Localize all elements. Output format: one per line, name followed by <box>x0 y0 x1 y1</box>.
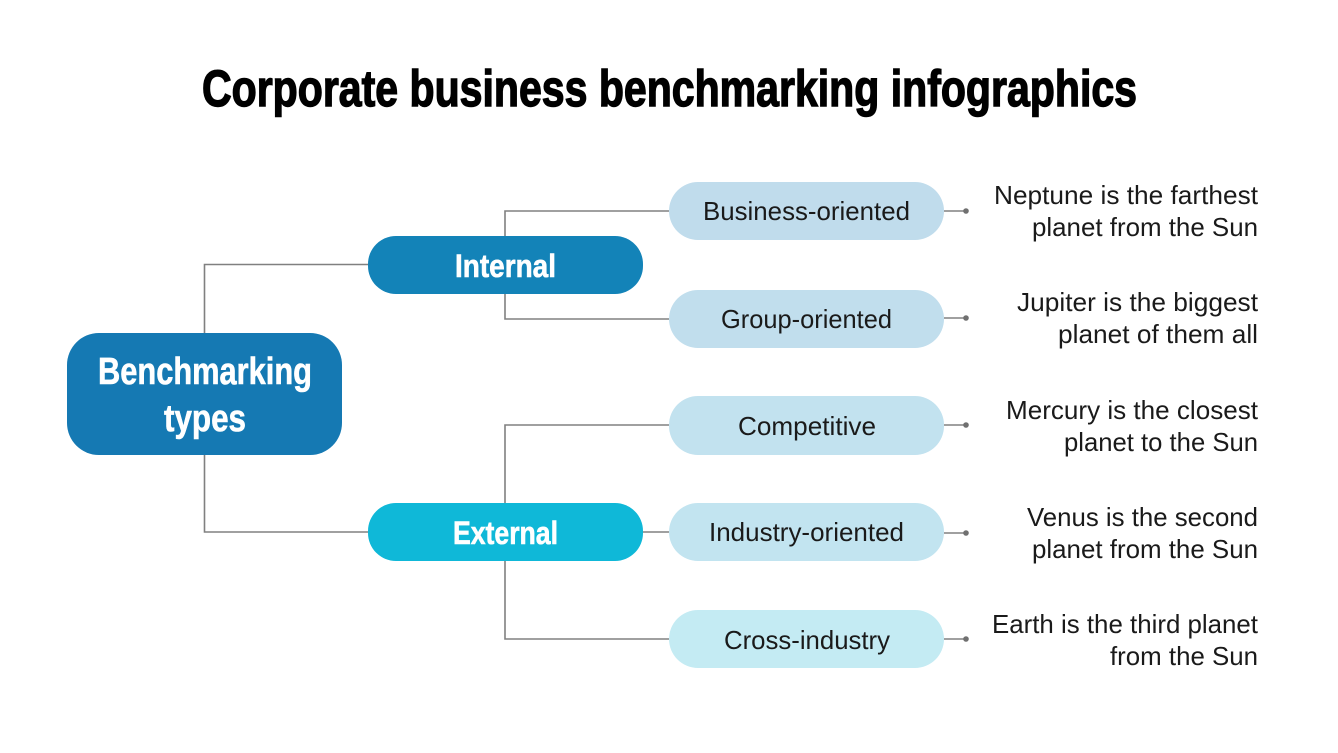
row: Industry-oriented: Venus is the second <box>1027 502 1258 532</box>
connector: external to industry-oriented <box>643 531 669 533</box>
row: Group-oriented: planet of them all <box>1058 319 1258 349</box>
row: Cross-industry <box>669 609 1259 671</box>
row: Business-oriented: Business-oriented <box>703 196 910 226</box>
row: Cross-industry: Earth is the third planet <box>992 609 1259 639</box>
row: Competitive: Competitive <box>738 411 876 441</box>
root node: Benchmarking types: Benchmarking <box>98 351 312 393</box>
row: Group-oriented: Group-oriented <box>721 304 892 334</box>
row: Group-oriented: Jupiter is the biggest <box>1017 287 1259 317</box>
row: Competitive: planet to the Sun <box>1064 427 1258 457</box>
connector: root to internal <box>204 264 368 333</box>
connector: internal to business-oriented <box>505 211 669 236</box>
node: Internal: Internal <box>455 248 556 284</box>
node: Internal <box>368 236 643 294</box>
row: Industry-oriented <box>669 502 1258 564</box>
connector: internal to group-oriented <box>505 294 669 319</box>
row: Competitive <box>669 395 1259 457</box>
row: Industry-oriented: planet from the Sun <box>1032 534 1258 564</box>
row: Business-oriented: planet from the Sun <box>1032 212 1258 242</box>
connector: external to competitive <box>505 425 669 503</box>
row: Group-oriented <box>669 287 1259 349</box>
row: Business-oriented: Neptune is the farthest <box>994 180 1259 210</box>
row: Competitive: Mercury is the closest <box>1006 395 1259 425</box>
row: Business-oriented <box>669 180 1259 242</box>
node: External <box>368 503 643 561</box>
connector: root to external <box>204 455 368 532</box>
root node: Benchmarking types: types <box>164 398 246 440</box>
node: External: External <box>453 515 558 551</box>
connector: external to cross-industry <box>505 561 669 639</box>
title: Corporate business benchmarking infographics <box>202 60 1137 117</box>
row: Industry-oriented: Industry-oriented <box>709 517 904 547</box>
root node: Benchmarking types <box>67 333 342 455</box>
row: Cross-industry: Cross-industry <box>724 625 890 655</box>
row: Cross-industry: from the Sun <box>1110 641 1258 671</box>
